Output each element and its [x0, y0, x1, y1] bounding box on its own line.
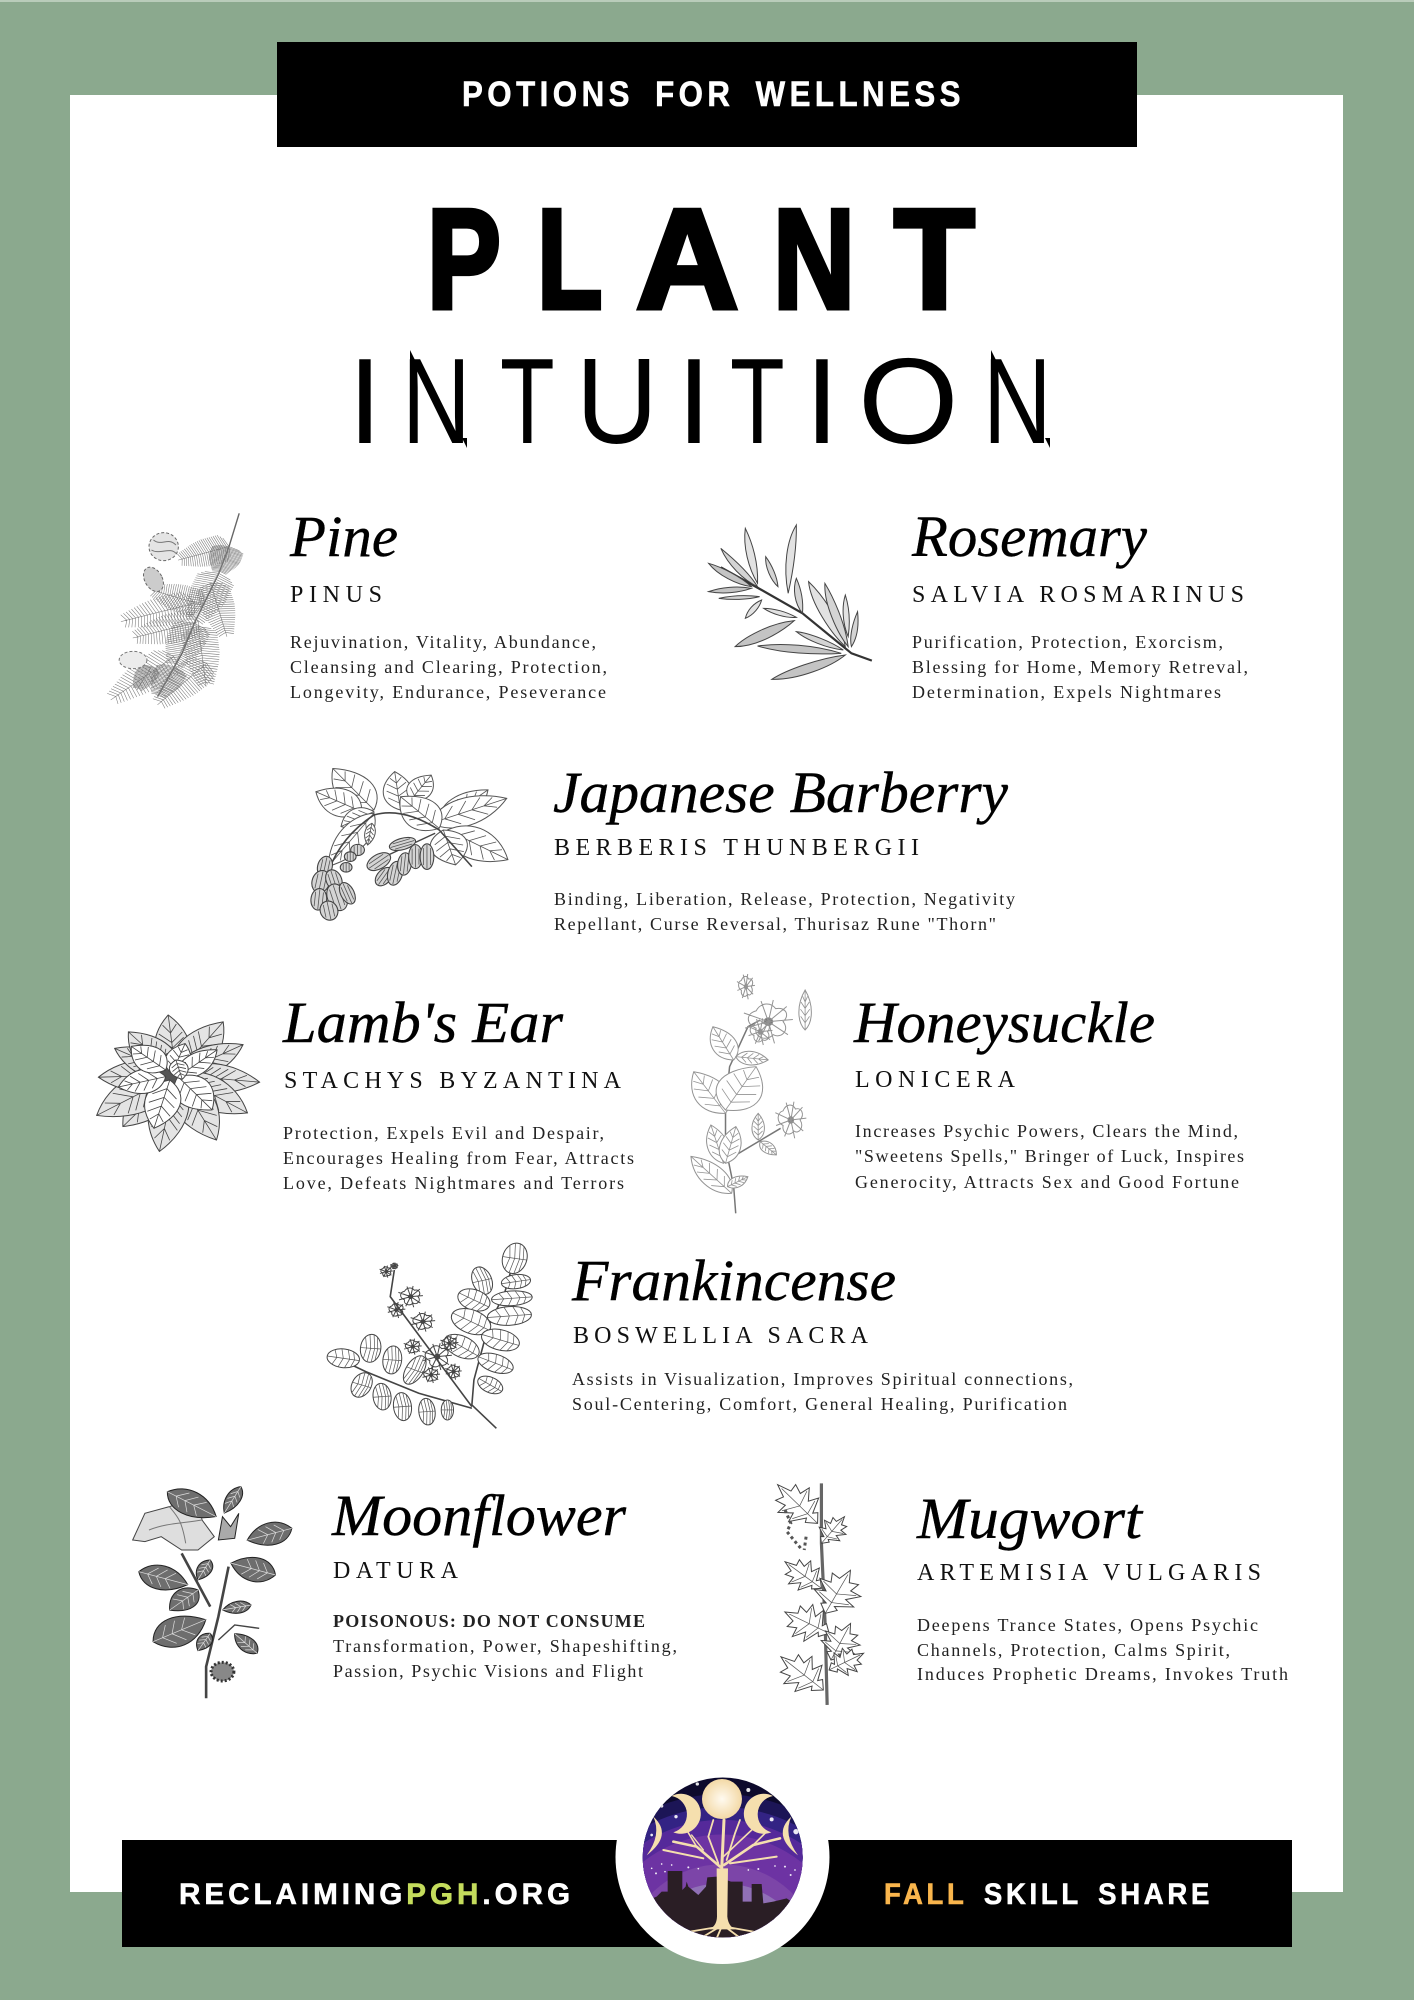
title: INTUITION: [348, 333, 1052, 469]
icon: pine sprig: [99, 513, 245, 715]
latin name: Boswellia Sacra: BOSWELLIA SACRA: [573, 1323, 869, 1349]
description: pine: Cleansing and Clearing, Protection,: [290, 657, 607, 677]
description: moonflower: [333, 1611, 677, 1681]
title: INTUITION: N: [402, 333, 471, 469]
title: INTUITION: I: [348, 333, 382, 469]
description: moonflower: POISONOUS: DO NOT CONSUME: [333, 1611, 645, 1631]
plant name: Rosemary: Rosemary: [911, 504, 1147, 569]
description: mugwort: Induces Prophetic Dreams, Invokes Truth: [917, 1664, 1288, 1684]
title: INTUITION: T: [500, 333, 555, 469]
description: honeysuckle: [855, 1121, 1244, 1192]
latin name: Berberis Thunbergii: BERBERIS THUNBERGII: [554, 835, 919, 861]
icon: rosemary sprig: [709, 525, 872, 679]
icon: lamb's ear rosette: [85, 1012, 261, 1154]
panel: honeysuckle: [680, 974, 1244, 1213]
footer text: website: RECLAIMINGPGH.ORG: [179, 1878, 574, 1911]
plant name: Pine: Pine: [289, 504, 398, 569]
title: PLANT: T: [894, 180, 975, 339]
panel: moonflower: [133, 1482, 677, 1698]
description: pine: [290, 632, 607, 702]
plant name: Mugwort: Mugwort: [916, 1486, 1144, 1551]
description: rosemary: Determination, Expels Nightmares: [912, 682, 1221, 702]
plant name: Moonflower: Moonflower: [331, 1483, 626, 1548]
description: moonflower: Passion, Psychic Visions and Flight: [333, 1661, 643, 1681]
description: frankincense: Soul-Centering, Comfort, General Healing, Purification: [572, 1394, 1067, 1414]
plant name: Japanese Barberry: Japanese Barberry: [553, 760, 1008, 825]
latin name: Datura: DATURA: [333, 1558, 459, 1584]
title: INTUITION: U: [576, 333, 658, 469]
description: frankincense: Assists in Visualization, Improves Spiritual connections,: [572, 1369, 1073, 1389]
white ring behind logo: [616, 1750, 830, 1964]
description: lamb's ear: [283, 1123, 634, 1193]
title: INTUITION: N: [983, 333, 1052, 469]
description: lamb's ear: Protection, Expels Evil and Despair,: [283, 1123, 604, 1143]
panel: japanese barberry: [308, 759, 1015, 934]
latin name: Lonicera: LONICERA: [855, 1067, 1016, 1093]
panel: mugwort: [762, 1472, 1288, 1705]
description: honeysuckle: Increases Psychic Powers, Clears the Mind,: [855, 1121, 1238, 1141]
header banner: [277, 42, 1137, 147]
header banner: POTIONS FOR WELLNESS: [462, 75, 965, 114]
panel: rosemary: [709, 504, 1248, 702]
latin name: Salvia Rosmarinus: SALVIA ROSMARINUS: [912, 582, 1244, 608]
title: PLANT: P: [427, 180, 501, 339]
description: rosemary: Purification, Protection, Exorcism,: [912, 632, 1223, 652]
description: rosemary: Blessing for Home, Memory Retreval,: [912, 657, 1248, 677]
title: PLANT: [427, 180, 976, 339]
footer text: fall skill share: FALL SKILL SHARE: [884, 1878, 1213, 1911]
description: barberry: Repellant, Curse Reversal, Thurisaz Rune "Thorn": [554, 914, 996, 934]
latin name: Stachys Byzantina: STACHYS BYZANTINA: [284, 1068, 622, 1094]
description: barberry: [554, 889, 1015, 934]
description: mugwort: [917, 1615, 1288, 1684]
detail: pointed vertices of the N letters: [410, 350, 1050, 448]
panel: lamb's ear: [85, 990, 634, 1193]
icon: mugwort stem: [762, 1472, 871, 1705]
panel: pine: [99, 504, 607, 715]
description: frankincense: [572, 1369, 1073, 1414]
description: rosemary: [912, 632, 1248, 702]
description: honeysuckle: "Sweetens Spells," Bringer of Luck, Inspires: [855, 1146, 1244, 1166]
plant name: Honeysuckle: Honeysuckle: [853, 990, 1155, 1055]
title: INTUITION: O: [858, 333, 959, 469]
description: honeysuckle: Generocity, Attracts Sex and Good Fortune: [855, 1172, 1239, 1192]
panel: frankincense: [325, 1241, 1073, 1428]
title: PLANT: L: [537, 180, 602, 339]
plant name: Lamb's Ear: Lamb's Ear: [282, 990, 563, 1055]
description: barberry: Binding, Liberation, Release, Protection, Negativity: [554, 889, 1015, 909]
title: PLANT: N: [773, 180, 855, 339]
description: lamb's ear: Love, Defeats Nightmares and Terrors: [283, 1173, 624, 1193]
description: pine: Rejuvination, Vitality, Abundance,: [290, 632, 596, 652]
footer banner: [122, 1840, 1292, 1947]
description: mugwort: Channels, Protection, Calms Spirit,: [917, 1640, 1230, 1660]
icon: frankincense branch: [325, 1241, 533, 1428]
description: moonflower: Transformation, Power, Shapeshifting,: [333, 1636, 677, 1656]
logo: moons and tree over city skyline: [642, 1778, 803, 1938]
title: PLANT: A: [636, 180, 739, 339]
plant name: Frankincense: Frankincense: [571, 1248, 896, 1313]
latin name: Pinus: PINUS: [290, 582, 382, 608]
icon: honeysuckle stem: [680, 974, 811, 1213]
icon: barberry branch: [308, 759, 518, 921]
description: mugwort: Deepens Trance States, Opens Psychic: [917, 1615, 1258, 1635]
description: pine: Longevity, Endurance, Peseverance: [290, 682, 606, 702]
title: INTUITION: T: [730, 333, 785, 469]
title: INTUITION: I: [805, 333, 839, 469]
description: lamb's ear: Encourages Healing from Fear, Attracts: [283, 1148, 634, 1168]
latin name: Artemisia Vulgaris: ARTEMISIA VULGARIS: [917, 1560, 1261, 1586]
title: INTUITION: I: [677, 333, 711, 469]
icon: datura plant: [133, 1482, 296, 1698]
